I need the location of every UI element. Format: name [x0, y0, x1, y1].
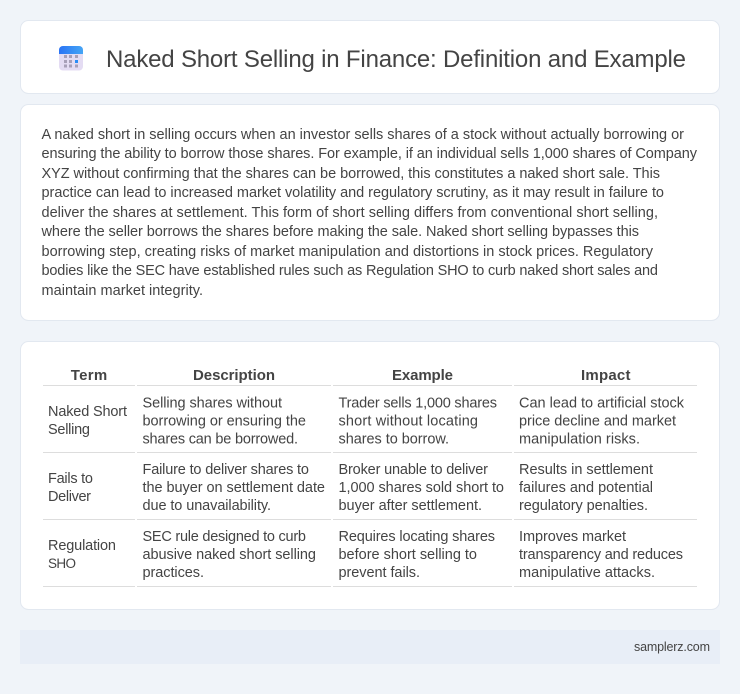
table row: fails to deliver	[43, 462, 697, 520]
table row: fails to deliver: 1,000 shares sold short to	[338, 480, 504, 496]
panel: comparison table	[20, 342, 720, 610]
table header row: Example	[392, 367, 453, 384]
table row: regulation sho: Improves market	[519, 529, 626, 545]
text block: paragraph: ensuring the ability to borrow those shares. For example, if an individual sells 1,000 shares of Company	[42, 146, 698, 162]
table header row: Description	[193, 367, 275, 384]
table row: naked short selling: Selling	[48, 422, 90, 438]
table row: fails to deliver: the buyer on settlement date	[142, 480, 325, 496]
text block: paragraph: A naked short in selling occurs when an investor sells shares of a stock without actually borrowing or	[42, 127, 684, 143]
panel: definition paragraph	[20, 104, 720, 320]
panel: header	[20, 20, 720, 94]
text block: paragraph: borrowing step, creating risks of market manipulation and distortions in stock prices. Regulatory	[42, 244, 654, 260]
table row: fails to deliver: failures and potential	[519, 480, 653, 496]
footer credit: samplerz.com	[634, 640, 710, 654]
table header row: Impact	[581, 367, 630, 384]
table row: naked short selling: Naked Short	[48, 404, 127, 420]
table header row: Term	[71, 367, 107, 384]
table row: naked short selling: shares can be borrowed.	[142, 432, 298, 448]
table row: fails to deliver: Fails to	[48, 471, 93, 487]
text block: paragraph: where the seller borrows the shares before making the sale. Naked short selling bypasses this	[40, 224, 639, 240]
table row: regulation sho: prevent fails.	[338, 565, 420, 581]
table row: fails to deliver: regulatory penalties.	[519, 498, 648, 514]
text block: paragraph: practice can lead to increased market volatility and regulatory scrutiny, as it may result in failure to	[42, 185, 664, 201]
table row: naked short selling: price decline and market	[519, 414, 676, 430]
table row: regulation sho: SEC rule designed to curb	[142, 529, 306, 545]
table row: fails to deliver: Deliver	[48, 489, 91, 505]
text block: paragraph: XYZ without confirming that the shares can be borrowed, this constitutes a naked short sale. This	[42, 166, 660, 182]
table row: regulation sho: practices.	[142, 565, 204, 581]
table row: fails to deliver: Results in settlement	[519, 462, 653, 478]
icon: calendar	[59, 46, 83, 70]
table row: naked short selling: borrowing or ensuring the	[142, 414, 306, 430]
text block: paragraph: bodies like the SEC have established rules such as Regulation SHO to curb naked short sales and	[42, 263, 658, 279]
table row: naked short selling: shares to borrow.	[338, 432, 449, 448]
table row: fails to deliver: buyer after settlement.	[338, 498, 482, 514]
table row: naked short selling: manipulation risks.	[519, 432, 640, 448]
table row: naked short selling: short without locating	[338, 414, 478, 430]
table row: naked short selling: Selling shares without	[142, 396, 282, 412]
table row: regulation sho: Regulation	[48, 538, 116, 554]
footer bar	[20, 630, 720, 664]
table row: fails to deliver: due to unavailability.	[142, 498, 271, 514]
table row: naked short selling	[43, 396, 697, 453]
text block: paragraph	[40, 127, 698, 299]
text block: paragraph: deliver the shares at settlement. This form of short selling differs from conventional short selling,	[42, 205, 658, 221]
text block: paragraph: maintain market integrity.	[42, 283, 203, 299]
table row: regulation sho: Requires locating shares	[338, 529, 495, 545]
table row: fails to deliver: Broker unable to deliver	[338, 462, 488, 478]
table row: naked short selling: Trader sells 1,000 shares	[338, 396, 497, 412]
table row: regulation sho: SHO	[48, 556, 76, 571]
table row: regulation sho: before short selling to	[338, 547, 477, 563]
table row: regulation sho: transparency and reduces	[519, 547, 683, 563]
table header row	[43, 367, 697, 386]
table row: fails to deliver: Failure to deliver shares to	[142, 462, 309, 478]
title: Naked Short Selling in Finance: Definition and Example	[106, 46, 686, 73]
table row: regulation sho: abusive naked short selling	[142, 547, 316, 563]
table row: regulation sho: manipulative attacks.	[519, 565, 655, 581]
table row: regulation sho	[43, 529, 697, 587]
table row: naked short selling: Can lead to artificial stock	[519, 396, 685, 412]
